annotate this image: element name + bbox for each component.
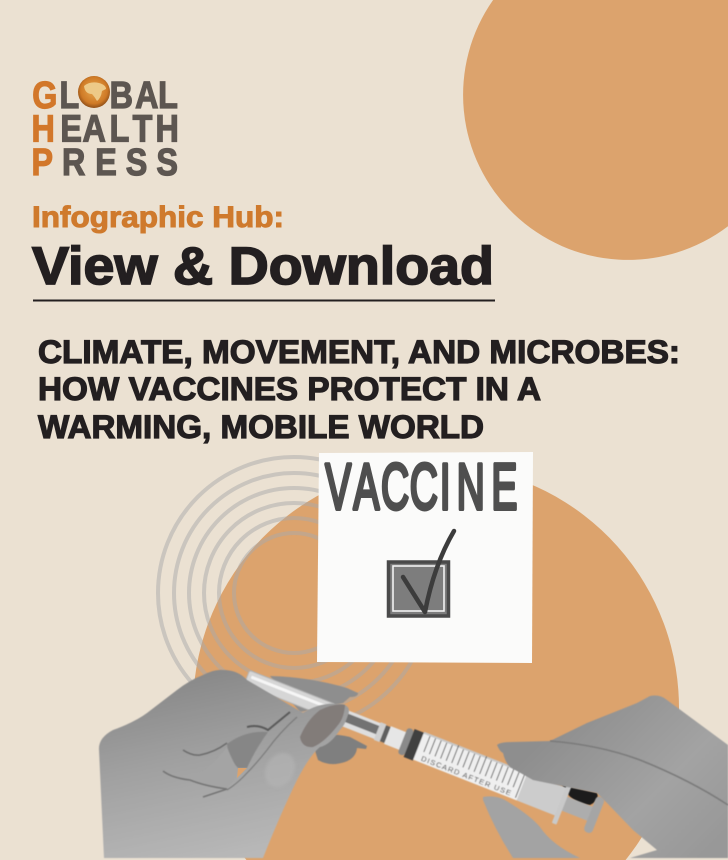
left hand: thumb knuckle highlight xyxy=(259,747,301,793)
handwritten word: VACCINE: VACCINE xyxy=(325,451,517,524)
syringe xyxy=(238,657,607,838)
heading: Infographic Hub: Infographic Hub: xyxy=(32,201,284,234)
heading rule xyxy=(33,300,495,302)
right hand: finger divide xyxy=(550,741,728,805)
needle cap xyxy=(244,670,335,718)
left hand: orange gap xyxy=(237,768,247,778)
right hand xyxy=(497,696,728,858)
left hand: index and middle fingertips xyxy=(270,676,367,764)
title: CLIMATE, MOVEMENT, AND MICROBES: xyxy=(38,334,680,370)
left thumb nail xyxy=(300,705,345,747)
syringe hub xyxy=(329,705,407,750)
title xyxy=(38,334,680,445)
checkbox with tick xyxy=(388,531,454,616)
right hand: shadow behind plunger xyxy=(562,785,598,805)
heading: View & Download: View & Download xyxy=(32,237,494,296)
decorative circle: top right xyxy=(463,0,728,260)
logo globe xyxy=(78,76,110,108)
concentric rings xyxy=(158,457,430,729)
barrel graduations xyxy=(421,734,526,798)
left hand xyxy=(99,670,349,858)
title: HOW VACCINES PROTECT IN A xyxy=(38,371,541,407)
left hand: curled fingers xyxy=(163,712,297,797)
barrel label: DISCARD AFTER USE xyxy=(420,754,512,797)
logo row: GLOBAL: GLBAL xyxy=(32,75,178,117)
logo row: PRESS: PRESS xyxy=(31,142,178,184)
decorative circle: behind vaccine note xyxy=(193,465,679,860)
logo row: HEALTH: HEALTH xyxy=(31,108,179,150)
right hand: lower finger xyxy=(483,796,580,858)
left hand: creases xyxy=(247,712,290,730)
left hand: thumb edge xyxy=(227,717,297,790)
logo: Global Health Press xyxy=(31,75,179,184)
syringe barrel xyxy=(413,732,566,815)
vaccine sticky note xyxy=(317,451,533,663)
plunger xyxy=(552,780,573,825)
title: WARMING, MOBILE WORLD xyxy=(38,409,484,445)
